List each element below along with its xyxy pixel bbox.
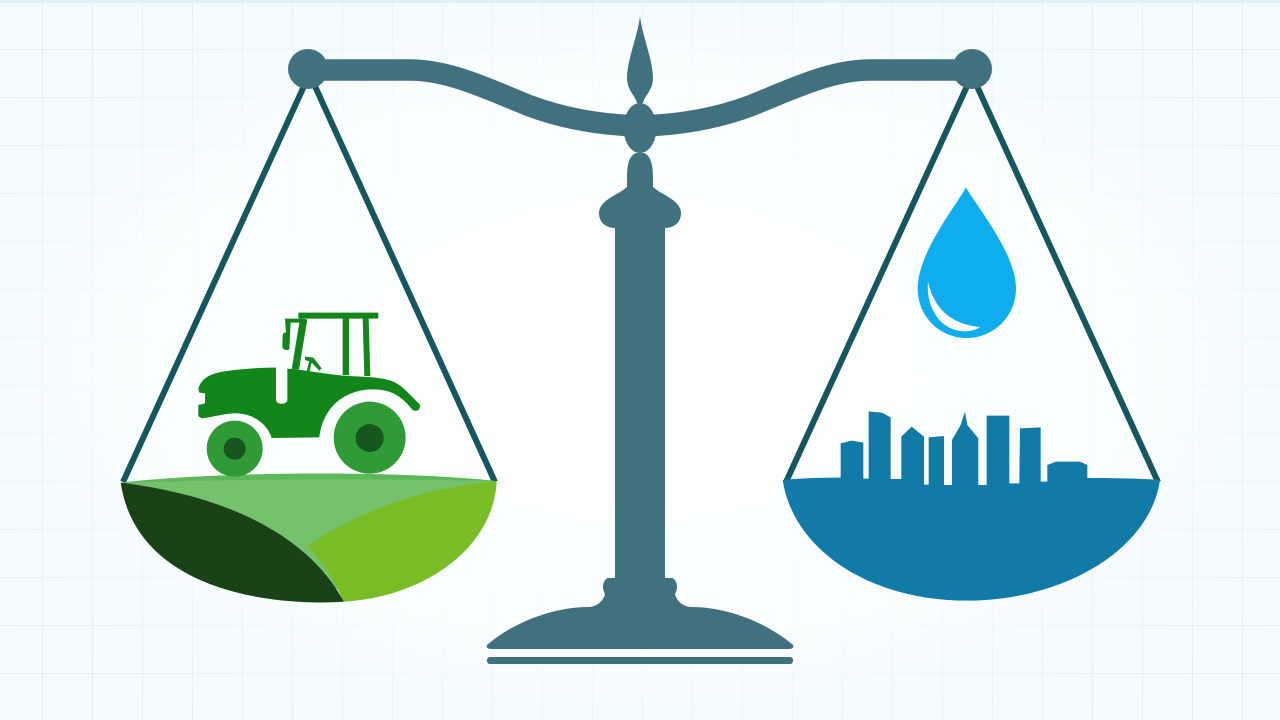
field middle [130, 479, 493, 597]
front wheel [207, 421, 263, 477]
drop [918, 187, 1016, 338]
cab pillars [292, 318, 370, 376]
icon: city skyline and pan bowl [783, 411, 1160, 601]
icon: tractor [198, 313, 420, 477]
base bar [487, 657, 793, 664]
front hub [224, 438, 246, 460]
balance scale stand and beam [288, 16, 992, 664]
beam [308, 70, 972, 126]
icon: water drop [918, 187, 1016, 338]
left scale ropes [123, 84, 495, 482]
mirror [282, 319, 301, 350]
tractor body [198, 368, 420, 438]
steering wheel [305, 357, 322, 372]
right pan: city skyline on bowl [783, 411, 1160, 601]
dark hill [121, 483, 344, 602]
rear wheel [334, 402, 406, 474]
center pivot [624, 103, 656, 153]
rear hub [356, 424, 384, 452]
left pan: farmland [121, 474, 497, 602]
right scale ropes [786, 84, 1158, 482]
highlight [928, 282, 980, 331]
cab roof [298, 313, 378, 319]
column with collars and base [487, 153, 793, 649]
left beam knob [288, 49, 328, 89]
bright hill [307, 482, 497, 602]
right beam knob [952, 49, 992, 89]
finial [627, 16, 653, 103]
field top strip [122, 474, 497, 507]
